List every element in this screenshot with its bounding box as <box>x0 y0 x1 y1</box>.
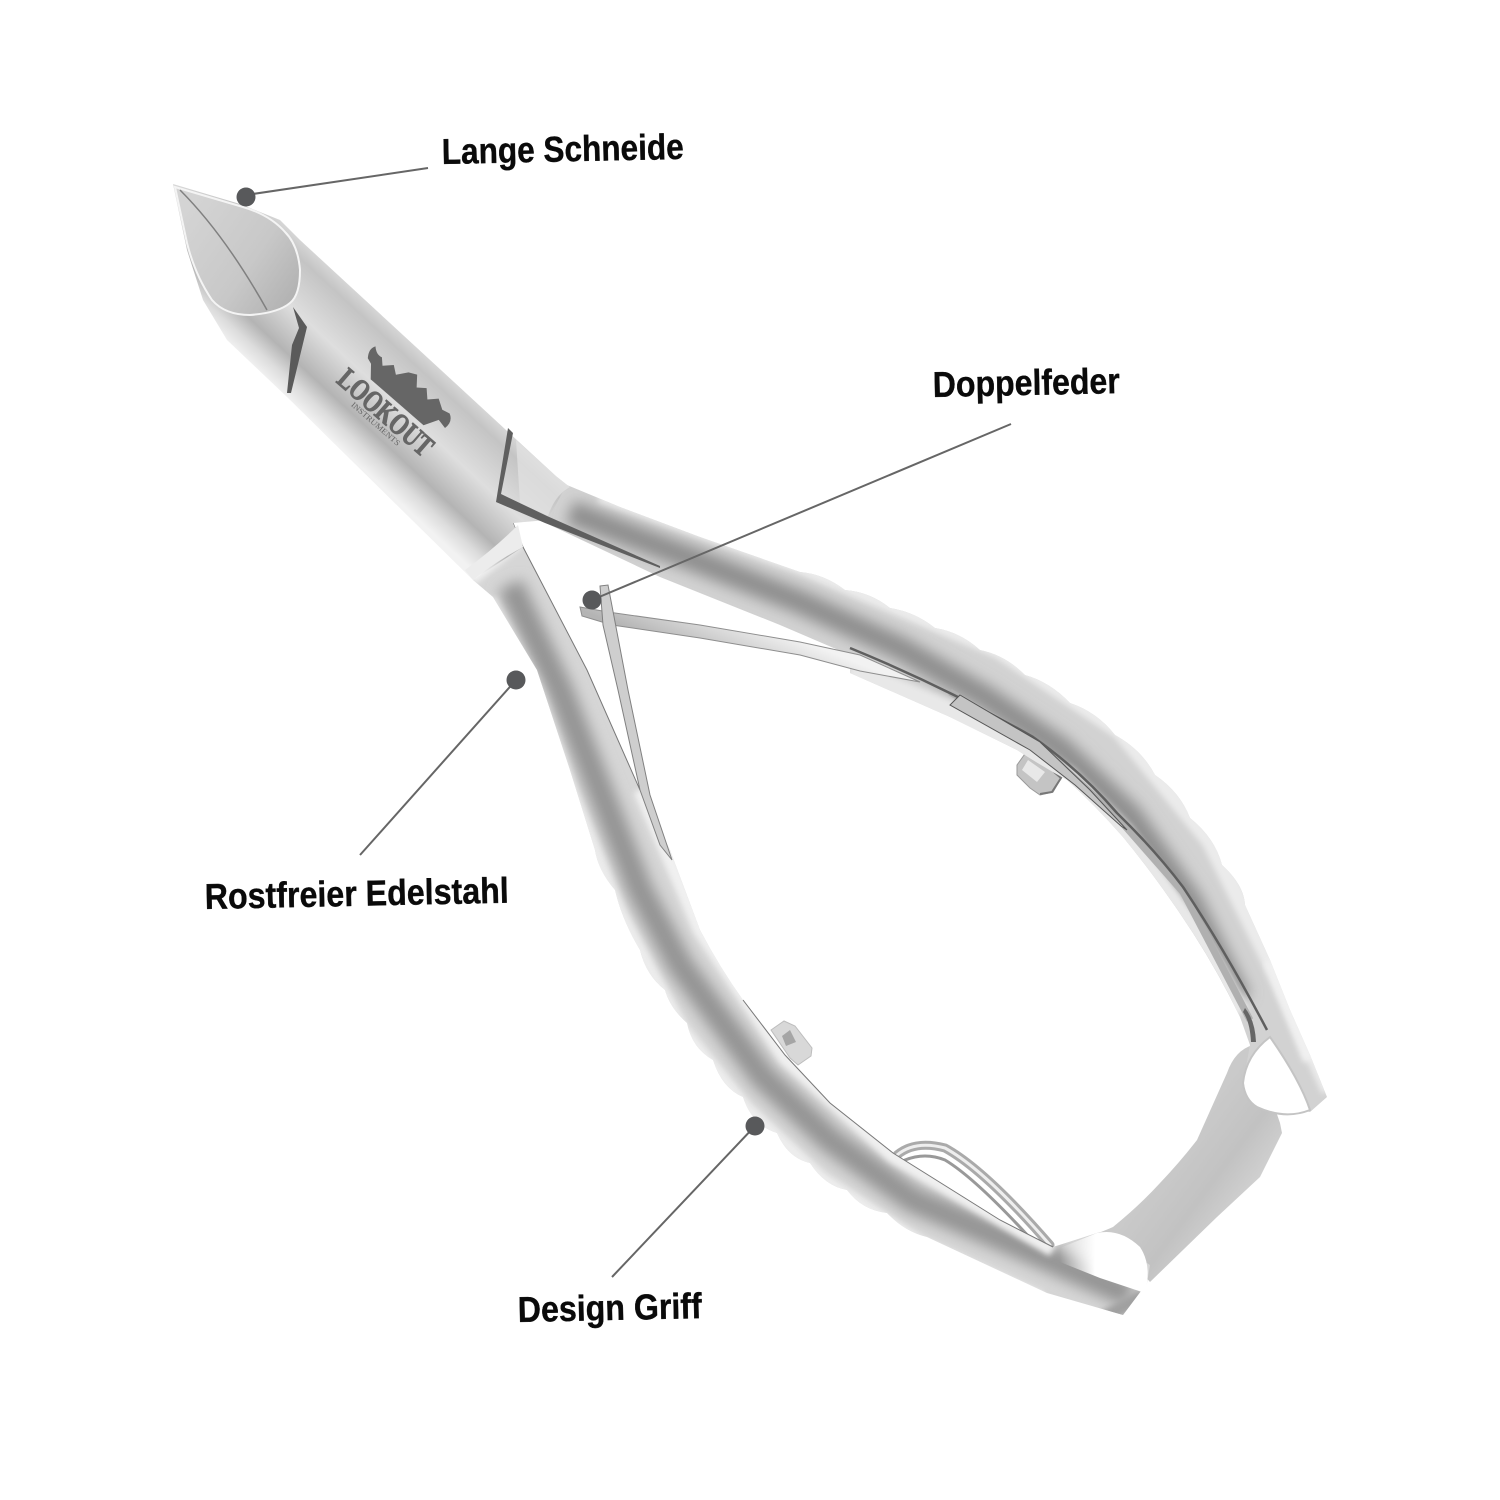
logo crown <box>356 341 460 437</box>
spring strip horizontal <box>580 607 920 682</box>
upper handle spring tongue <box>950 695 1127 830</box>
shoulder highlight upper <box>516 440 570 516</box>
callout: Rostfreier Edelstahl <box>204 670 526 917</box>
callout: Rostfreier Edelstahl: Rostfreier Edelstahl <box>204 870 509 917</box>
callout: Doppelfeder <box>582 360 1120 610</box>
cutting line <box>180 190 267 310</box>
slot near upper pad <box>1243 1008 1256 1042</box>
head slot 2 <box>496 428 660 568</box>
lower wire spring loop <box>897 1145 1050 1245</box>
spring strip vertical <box>600 585 672 860</box>
central plate <box>1063 1045 1282 1282</box>
logo subtitle: INSTRUMENTS <box>349 400 402 448</box>
lower pad <box>1060 1232 1148 1292</box>
logo wordmark: LOOKOUT <box>331 362 440 463</box>
callout: Design Griff: Design Griff <box>517 1285 703 1330</box>
icon: nail nipper illustration <box>173 184 1360 1330</box>
callout: Design Griff <box>517 1116 764 1330</box>
head slot 1 <box>287 307 307 393</box>
upper pad <box>1243 1037 1310 1114</box>
head <box>173 184 660 580</box>
logo <box>329 337 462 465</box>
cutting cavity <box>175 187 300 315</box>
callout: Doppelfeder: Doppelfeder <box>932 360 1120 405</box>
lower screw <box>771 1021 812 1065</box>
lower handle thin edge <box>513 523 1053 1247</box>
upper handle groove <box>850 648 1267 1030</box>
shoulder highlight <box>465 525 523 580</box>
lower handle <box>473 548 1150 1315</box>
callout: Lange Schneide <box>236 126 684 206</box>
upper screw <box>1017 751 1063 795</box>
callout: Lange Schneide: Lange Schneide <box>441 126 684 172</box>
upper handle <box>549 485 1327 1112</box>
